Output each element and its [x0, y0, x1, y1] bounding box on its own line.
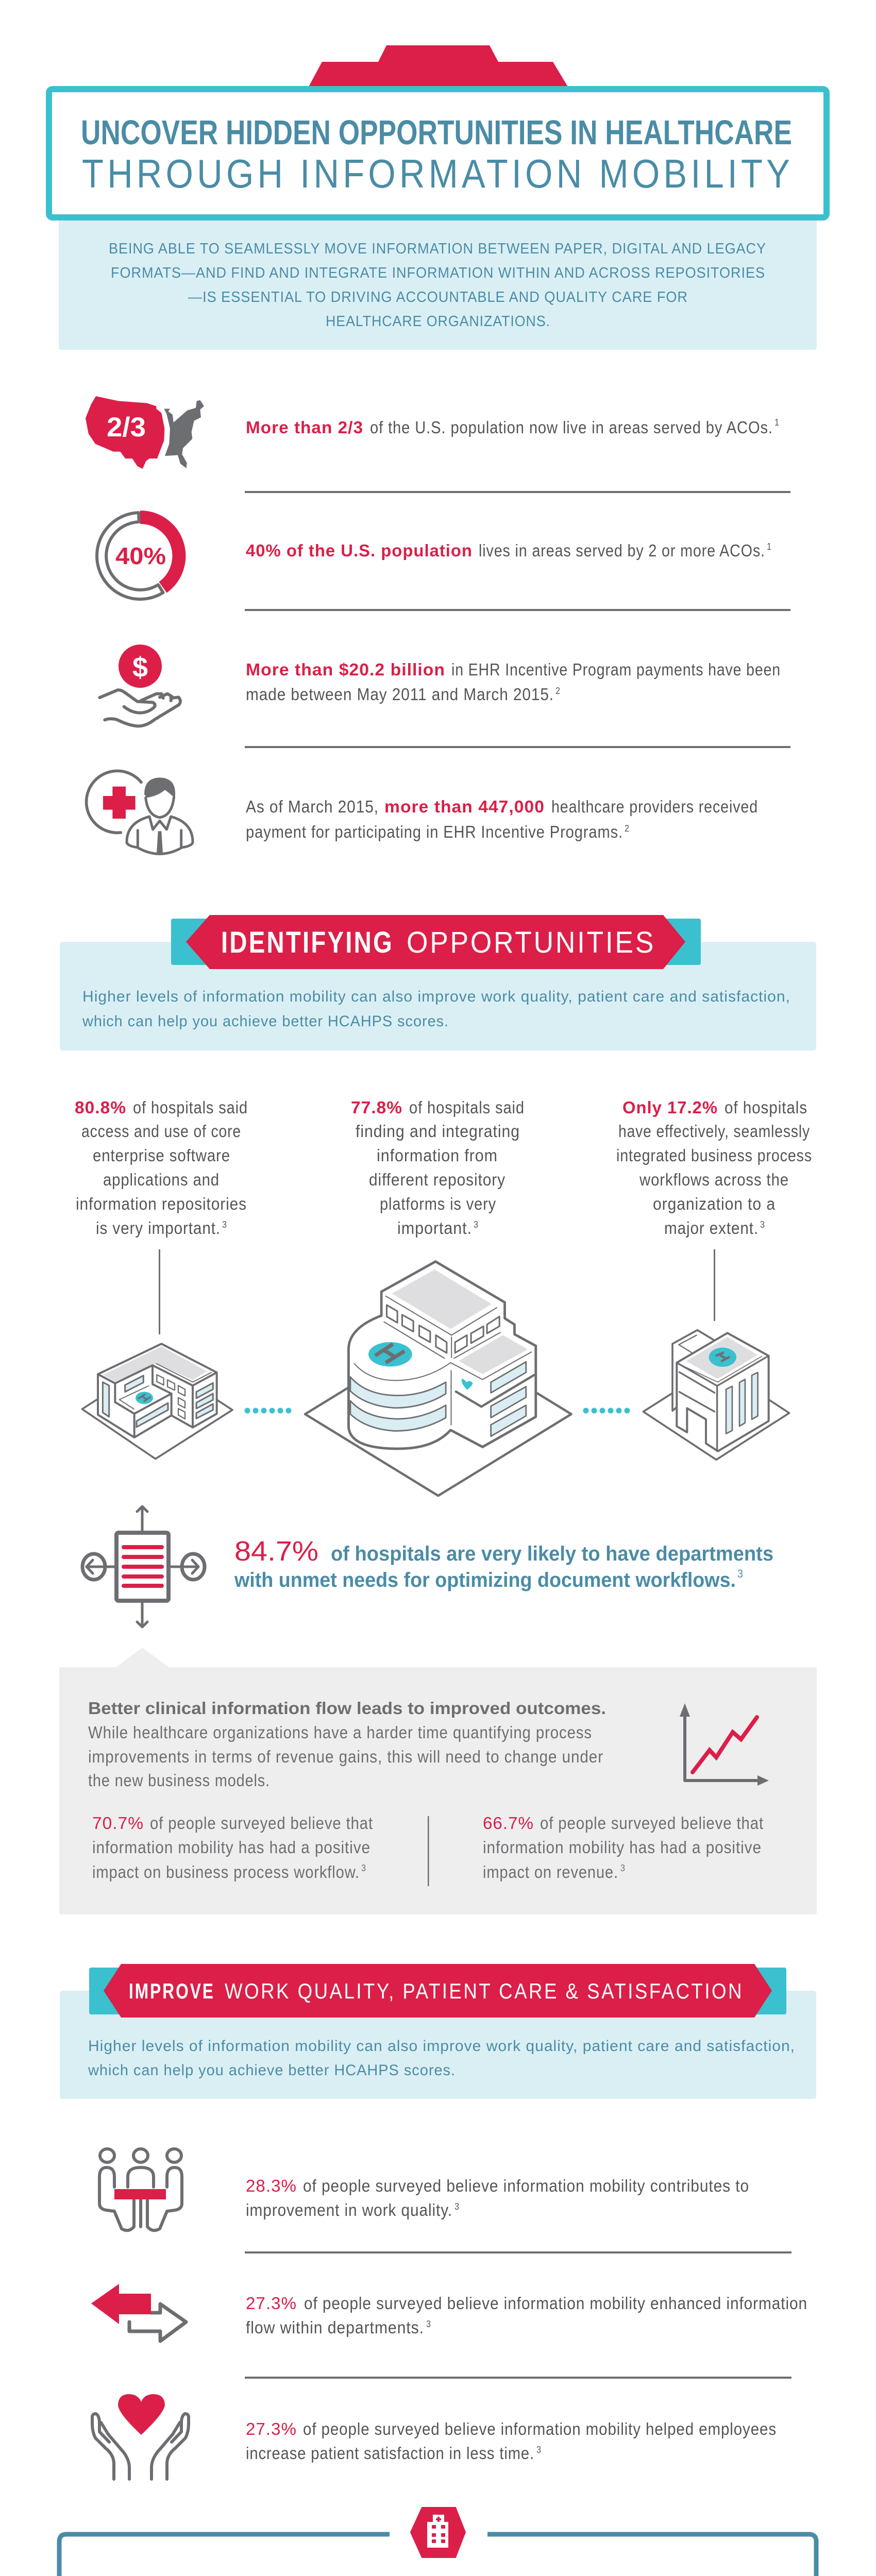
text column: 77.8 percent: 3	[474, 1219, 478, 1230]
heading banner: improve: WORK QUALITY, PATIENT CARE & SATISFACTION	[225, 1979, 744, 2003]
text column: only 17.2 percent: 3	[760, 1219, 765, 1230]
icon: hand with dollar coin: $	[132, 651, 148, 683]
text column: 80.8 percent: enterprise software	[93, 1146, 230, 1165]
text column: only 17.2 percent: Only 17.2%	[622, 1098, 718, 1117]
stat: 70.7 percent: of people surveyed believe that	[150, 1814, 373, 1833]
stat row: 40 percent	[97, 513, 771, 599]
text column: 80.8 percent	[75, 1098, 248, 1238]
text column: 77.8 percent: of hospitals said	[409, 1098, 525, 1117]
icon: US map two thirds: 2/3	[107, 412, 146, 443]
panel heading: Better clinical information flow leads to improved outcomes.	[88, 1699, 606, 1718]
text column: only 17.2 percent: organization to a	[653, 1194, 776, 1213]
stat text: More than 2/3	[246, 418, 363, 437]
icon: hand with dollar coin	[99, 645, 180, 726]
icon: exchange arrows	[91, 2284, 186, 2341]
panel body text: the new business models.	[88, 1771, 270, 1790]
stat text: 3	[454, 2201, 459, 2212]
text block: intro	[109, 241, 766, 330]
stat row: information flow	[91, 2284, 807, 2341]
stat text: 1	[774, 417, 779, 428]
text column: only 17.2 percent: integrated business process	[616, 1146, 812, 1165]
text column: 80.8 percent: is very important.	[96, 1218, 221, 1238]
stat text: in EHR Incentive Program payments have been	[451, 660, 781, 679]
icon: donut 40 percent	[97, 513, 179, 599]
stat text: 27.3%	[246, 2294, 297, 2313]
heading banner: improve: IMPROVE	[129, 1979, 215, 2003]
stat: 66.7 percent: impact on revenue.	[483, 1862, 618, 1882]
text column: 80.8 percent: 3	[222, 1219, 227, 1230]
stat: 66.7 percent: of people surveyed believe that	[540, 1814, 764, 1833]
text block: intro: FORMATS—AND FIND AND INTEGRATE INFORMATION WITHIN AND ACROSS REPOSITORIES	[111, 265, 765, 281]
text block: higher levels	[82, 988, 790, 1030]
title line 2: THROUGH INFORMATION MOBILITY	[82, 151, 794, 196]
stat text: 3	[536, 2445, 541, 2455]
stat text: of people surveyed believe information mobility enhanced information	[304, 2294, 807, 2313]
stat row: patient satisfaction	[92, 2394, 777, 2479]
stat row: 20.2 billion	[99, 645, 781, 726]
stat text: of people surveyed believe information mobility contributes to	[303, 2176, 749, 2195]
text column: 80.8 percent: access and use of core	[81, 1122, 241, 1141]
text column: 77.8 percent: 77.8%	[351, 1098, 402, 1117]
stat: 66.7 percent: 3	[620, 1863, 625, 1873]
stat text	[246, 2294, 807, 2337]
panel body text: improvements in terms of revenue gains, this will need to change under	[88, 1747, 603, 1766]
stat text: 28.3%	[246, 2176, 297, 2195]
stat text: lives in areas served by 2 or more ACOs.	[479, 541, 765, 560]
stat text: 27.3%	[246, 2419, 297, 2438]
panel: better clinical information flow	[59, 1648, 817, 1914]
dotted connector: left	[244, 1408, 292, 1414]
text column: only 17.2 percent: major extent.	[664, 1218, 759, 1238]
illustration: large hospital	[305, 1262, 571, 1496]
stat: 70.7 percent: impact on business process workflow.	[92, 1862, 360, 1882]
connector line: left	[159, 1249, 160, 1334]
text block: higher levels: Higher levels of information mobility can also improve work quality, patient care and satisfaction,	[88, 2038, 795, 2055]
title box	[49, 89, 827, 217]
connector line: right	[714, 1249, 715, 1321]
text block: higher levels	[88, 2038, 795, 2079]
stat text: healthcare providers received	[551, 797, 758, 816]
icon: doctor with medical cross	[87, 771, 193, 854]
text column: 77.8 percent: platforms is very	[380, 1194, 496, 1213]
text column: 77.8 percent: finding and integrating	[356, 1122, 520, 1141]
icon: hospital hexagon badge	[411, 2507, 465, 2557]
icon: red hospital silhouette tab	[308, 45, 568, 88]
heading banner: improve	[89, 1964, 786, 2018]
text column: 80.8 percent: information repositories	[76, 1194, 247, 1213]
icon: hands holding heart	[92, 2394, 189, 2479]
stat row: 447,000 providers	[87, 771, 758, 854]
headline stat: 84.7 percent: 3	[737, 1567, 743, 1580]
stat: 70.7 percent: information mobility has had a positive	[92, 1838, 370, 1857]
icon: three people at table	[99, 2149, 182, 2230]
divider	[428, 1816, 429, 1886]
text block: intro: HEALTHCARE ORGANIZATIONS.	[326, 313, 550, 330]
headline stat: 84.7 percent: of hospitals are very likely to have departments	[331, 1543, 773, 1565]
text column: 77.8 percent: important.	[397, 1218, 472, 1238]
stat text	[246, 2419, 777, 2463]
icon: rising line chart	[680, 1703, 769, 1786]
text column: only 17.2 percent: have effectively, seamlessly	[618, 1122, 810, 1141]
text column: 77.8 percent	[351, 1098, 525, 1238]
stat text	[246, 2176, 749, 2219]
stat: 70.7 percent: 70.7%	[92, 1814, 144, 1833]
panel: intro text background and copy	[59, 216, 817, 350]
heading banner: identifying opportunities	[171, 915, 701, 969]
stat text: As of March 2015,	[246, 797, 379, 816]
stat: 66.7 percent	[483, 1814, 764, 1882]
text column: 77.8 percent: different repository	[369, 1170, 506, 1189]
headline stat: 84.7 percent: with unmet needs for optimizing document workflows.	[234, 1569, 736, 1591]
stat text: made between May 2011 and March 2015.	[246, 685, 554, 704]
icon: document workflow arrows	[82, 1506, 205, 1627]
stat text: 3	[426, 2319, 431, 2329]
panel: improve intro	[60, 1991, 816, 2099]
stat text: More than $20.2 billion	[246, 660, 445, 679]
stat: 70.7 percent: 3	[361, 1863, 366, 1873]
stat text: 40% of the U.S. population	[246, 541, 473, 560]
panel: identifying opportunities intro	[60, 942, 816, 1050]
heading banner: identifying opportunities: IDENTIFYING	[221, 926, 394, 959]
text column: only 17.2 percent	[616, 1098, 812, 1238]
stat row: two thirds of population	[86, 396, 779, 469]
text column: only 17.2 percent: of hospitals	[725, 1098, 807, 1117]
illustration: small hospital	[82, 1344, 232, 1459]
text block: intro: —IS ESSENTIAL TO DRIVING ACCOUNTABLE AND QUALITY CARE FOR	[188, 289, 688, 306]
text block: higher levels: which can help you achieve better HCAHPS scores.	[82, 1013, 449, 1030]
illustration: office tower	[643, 1330, 789, 1460]
stat text: of the U.S. population now live in areas served by ACOs.	[370, 418, 773, 437]
stat text: more than 447,000	[384, 797, 545, 816]
stat: 70.7 percent	[92, 1814, 373, 1882]
icon: donut 40 percent: 40%	[115, 543, 166, 569]
stat text	[246, 541, 771, 560]
text block: higher levels: which can help you achieve better HCAHPS scores.	[88, 2062, 456, 2079]
text column: 80.8 percent: applications and	[103, 1170, 220, 1189]
panel body text	[88, 1723, 603, 1790]
stat text	[246, 797, 758, 841]
headline stat: 84.7 percent	[234, 1536, 773, 1591]
text column: 80.8 percent: 80.8%	[75, 1098, 126, 1117]
heading banner: identifying opportunities: OPPORTUNITIES	[407, 926, 655, 959]
stat text: payment for participating in EHR Incentive Programs.	[246, 822, 623, 841]
text column: 80.8 percent: of hospitals said	[133, 1098, 248, 1117]
stat text: flow within departments.	[246, 2318, 424, 2337]
panel: what to remember	[59, 2507, 816, 2576]
stat text: of people surveyed believe information mobility helped employees	[303, 2419, 777, 2438]
stat text: 1	[767, 541, 771, 552]
panel body text: While healthcare organizations have a harder time quantifying process	[88, 1723, 592, 1742]
icon: US map two thirds	[86, 396, 204, 469]
stat text	[246, 417, 779, 437]
stat row: work quality	[99, 2149, 749, 2230]
stat: 66.7 percent: information mobility has had a positive	[483, 1838, 762, 1857]
text block: intro: BEING ABLE TO SEAMLESSLY MOVE INFORMATION BETWEEN PAPER, DIGITAL AND LEGACY	[109, 241, 766, 257]
text column: 77.8 percent: information from	[377, 1146, 498, 1165]
stat text: 2	[555, 686, 560, 696]
text column: only 17.2 percent: workflows across the	[639, 1170, 789, 1189]
dotted connector: right	[583, 1408, 630, 1414]
stat text	[246, 660, 781, 704]
stat text: 2	[625, 823, 629, 834]
stat text: improvement in work quality.	[246, 2200, 452, 2219]
text block: higher levels: Higher levels of information mobility can also improve work quality, patient care and satisfaction,	[82, 988, 790, 1005]
headline stat: 84.7 percent: 84.7%	[234, 1536, 318, 1567]
stat: 66.7 percent: 66.7%	[483, 1814, 534, 1833]
stat text: increase patient satisfaction in less time.	[246, 2444, 534, 2463]
